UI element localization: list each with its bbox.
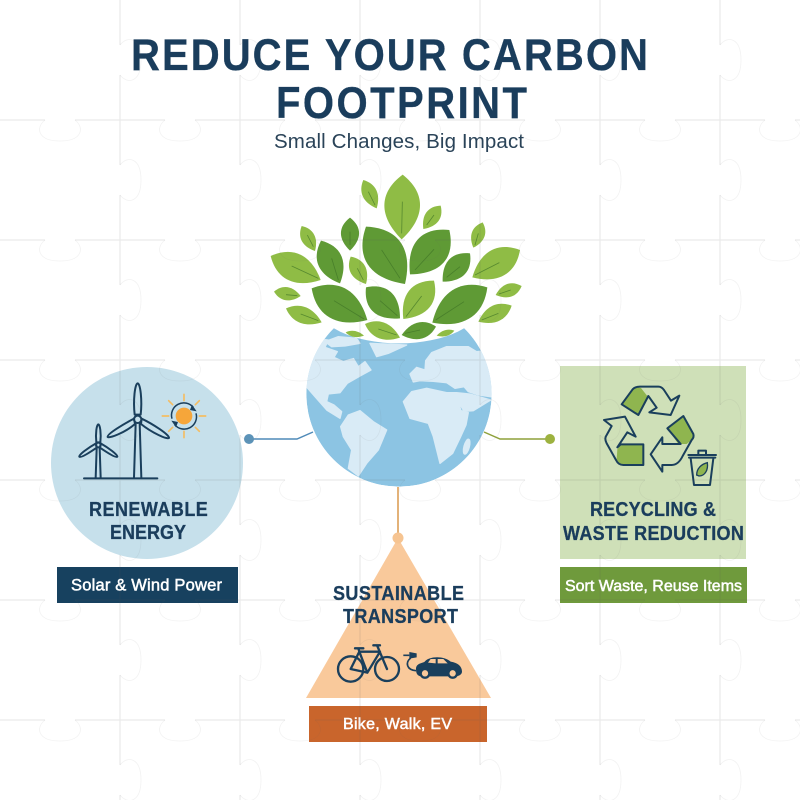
subtitle: Small Changes, Big Impact xyxy=(274,130,524,153)
title xyxy=(131,30,648,127)
connector: globe to recycling xyxy=(484,432,555,444)
connector dot xyxy=(392,532,404,544)
heading: RENEWABLE xyxy=(89,499,208,521)
heading: ENERGY xyxy=(110,522,186,544)
label bar: Solar & Wind Power xyxy=(71,576,222,594)
label bar xyxy=(560,567,747,603)
panel: sustainable transport xyxy=(306,487,491,742)
icon: bicycle xyxy=(338,645,399,682)
icon: wind turbines xyxy=(79,383,169,478)
connector: globe to renewable energy xyxy=(244,432,313,444)
heading xyxy=(333,583,464,628)
icon: trash bin xyxy=(688,451,716,485)
title: FOOTPRINT xyxy=(276,78,527,127)
icon: recycling arrows xyxy=(604,387,694,472)
panel: renewable energy xyxy=(51,367,243,603)
heading: WASTE REDUCTION xyxy=(563,523,744,545)
label bar xyxy=(309,706,487,742)
heading: TRANSPORT xyxy=(343,606,458,628)
icon: electric car xyxy=(403,652,462,678)
heading xyxy=(563,499,744,545)
connector: globe to transport xyxy=(397,487,399,535)
title: REDUCE YOUR CARBON xyxy=(131,30,648,79)
heading xyxy=(89,499,208,544)
leaves xyxy=(265,174,527,345)
label bar: Bike, Walk, EV xyxy=(343,716,452,733)
background square xyxy=(560,366,746,559)
background circle xyxy=(51,367,243,559)
label bar: Sort Waste, Reuse Items xyxy=(565,578,742,595)
triangle xyxy=(306,538,491,698)
panel: recycling xyxy=(560,366,747,603)
heading: SUSTAINABLE xyxy=(333,583,464,605)
globe xyxy=(306,328,492,486)
heading: RECYCLING & xyxy=(590,499,716,521)
icon: sun xyxy=(162,394,206,438)
label bar xyxy=(57,567,238,603)
